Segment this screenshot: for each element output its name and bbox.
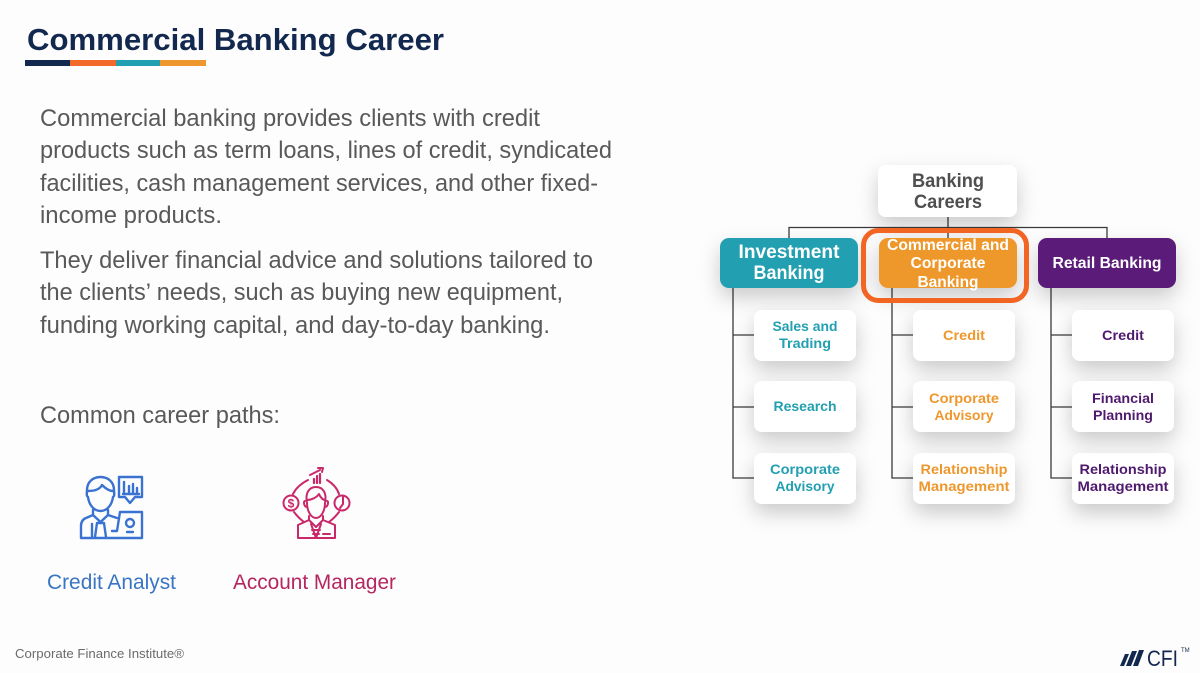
text block: commercial banking description: products such as term loans, lines of credit, syndicated <box>40 137 612 164</box>
sub-boxes: retail banking: Relationship <box>1080 461 1166 477</box>
root box: banking careers: Careers <box>914 191 982 213</box>
sub-boxes: retail banking: Credit <box>1102 327 1144 343</box>
highlight outline <box>864 230 1026 300</box>
org chart: banking careers <box>720 165 1176 504</box>
sub-boxes: commercial and corporate banking: Credit <box>943 327 985 343</box>
career paths heading: Common career paths: <box>40 402 280 429</box>
sub-boxes: retail banking <box>1072 310 1174 504</box>
logo: CFI: TM <box>1181 648 1190 654</box>
text block: commercial banking description: income products. <box>40 202 222 229</box>
connector lines <box>733 217 1107 478</box>
text block: commercial banking description: Commercial banking provides clients with credit <box>40 105 540 132</box>
text block: advice and solutions: They deliver financial advice and solutions tailored to <box>40 247 593 274</box>
title underline <box>25 60 206 66</box>
column header: investment banking <box>720 238 858 288</box>
column header: commercial and corporate banking <box>879 237 1017 291</box>
sub-boxes: retail banking: Financial <box>1092 390 1154 406</box>
root box: banking careers: Banking <box>912 170 984 192</box>
sub-boxes: investment banking: Corporate <box>770 461 840 477</box>
account manager label: Account Manager <box>233 571 396 594</box>
sub-boxes: commercial and corporate banking <box>913 310 1015 504</box>
icon: account manager <box>284 468 350 538</box>
column header: retail banking <box>1038 238 1176 288</box>
sub-boxes: investment banking: Advisory <box>776 478 835 494</box>
sub-boxes: commercial and corporate banking: Corporate <box>929 390 999 406</box>
sub-boxes: investment banking: Trading <box>779 335 831 351</box>
column header: investment banking: Banking <box>754 262 824 284</box>
logo: CFI <box>1120 646 1190 671</box>
sub-boxes: commercial and corporate banking: Management <box>918 478 1010 494</box>
sub-boxes: retail banking: Management <box>1078 478 1169 494</box>
sub-boxes: investment banking: Research <box>774 398 836 414</box>
footer credit: Corporate Finance Institute® <box>15 646 184 661</box>
logo: CFI: CFI <box>1147 646 1178 671</box>
column header: retail banking: Retail Banking <box>1052 255 1162 272</box>
text block: advice and solutions: the clients’ needs, such as buying new equipment, <box>40 279 563 306</box>
text block: commercial banking description <box>40 105 612 229</box>
sub-boxes: commercial and corporate banking: Advisory <box>934 407 994 423</box>
text block: advice and solutions: funding working capital, and day-to-day banking. <box>40 312 550 339</box>
sub-boxes: investment banking <box>754 310 856 504</box>
icon: account manager: $ <box>288 496 295 510</box>
column header: commercial and corporate banking: Corporate <box>910 255 986 272</box>
credit analyst label: Credit Analyst <box>47 571 176 594</box>
sub-boxes: investment banking: Sales and <box>772 318 838 334</box>
text block: advice and solutions <box>40 247 593 339</box>
column header: commercial and corporate banking: Banking <box>918 274 978 291</box>
title: Commercial Banking Career <box>27 22 444 57</box>
icon: credit analyst <box>81 477 142 538</box>
root box: banking careers <box>878 165 1017 217</box>
column header: commercial and corporate banking: Commercial and <box>887 237 1009 254</box>
column header: investment banking: Investment <box>738 241 840 263</box>
sub-boxes: commercial and corporate banking: Relationship <box>920 461 1008 477</box>
sub-boxes: retail banking: Planning <box>1093 407 1153 423</box>
text block: commercial banking description: facilities, cash management services, and other fixed- <box>40 170 598 197</box>
